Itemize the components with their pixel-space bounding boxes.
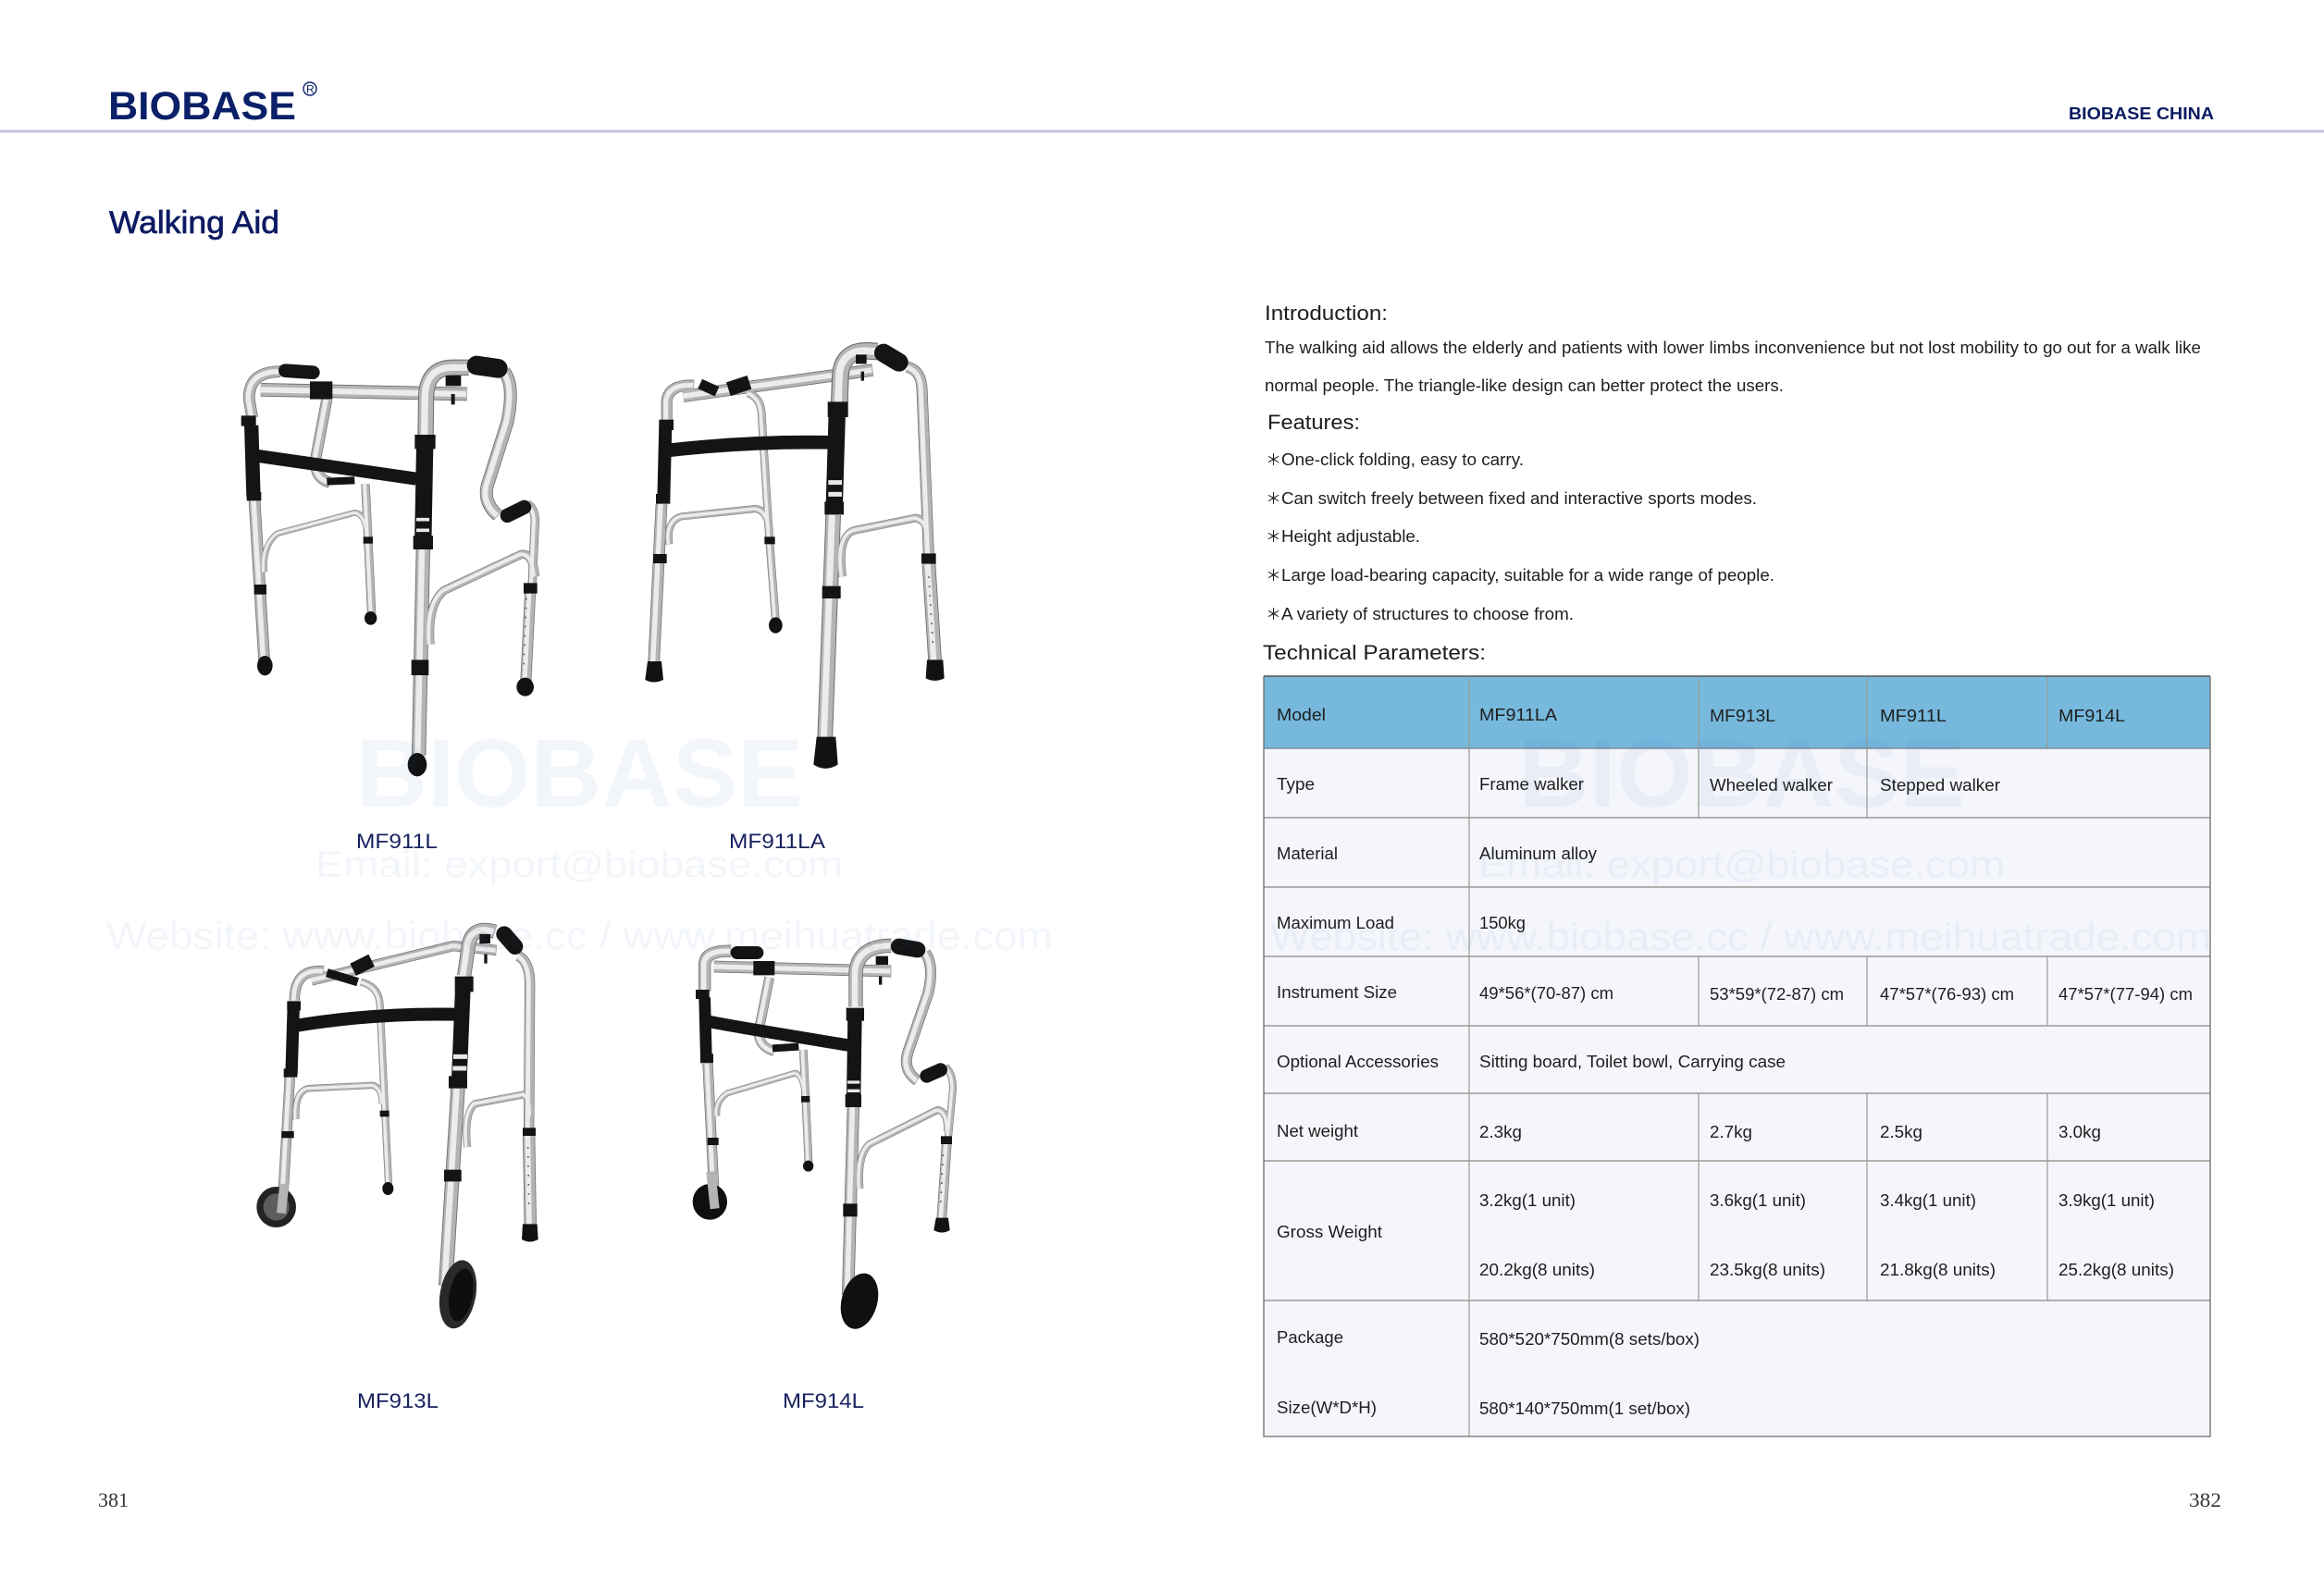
model label: MF914L: MF914L	[783, 1389, 864, 1412]
row: Instrument Size: 47*57*(76-93) cm	[1880, 984, 2014, 1004]
walker photo: MF911L	[241, 365, 538, 776]
row: Gross Weight: 3.9kg(1 unit)	[2058, 1190, 2155, 1210]
row: Type	[1277, 774, 2000, 795]
features list: ＊	[1266, 490, 1281, 508]
watermark over left page: Website: www.biobase.cc / www.meihuatrade.com	[106, 914, 1053, 957]
row: Maximum Load	[1277, 913, 1526, 932]
watermark over right page: Website: www.biobase.cc / www.meihuatrade.com	[1270, 915, 2211, 958]
row: Gross Weight	[1277, 1190, 2174, 1279]
row: Gross Weight: 23.5kg(8 units)	[1710, 1260, 1825, 1279]
row: Instrument Size: 47*57*(77-94) cm	[2058, 984, 2193, 1004]
row: Optional Accessories	[1277, 1052, 1786, 1071]
watermark over left page	[106, 720, 1053, 957]
introduction text: normal people. The triangle-like design can better protect the users.	[1265, 376, 1784, 395]
row: Type: Stepped walker	[1880, 775, 2000, 795]
page number 382: 382	[2189, 1488, 2221, 1511]
model label: MF911LA: MF911LA	[729, 830, 825, 853]
row: Gross Weight: 21.8kg(8 units)	[1880, 1260, 1996, 1279]
row: Gross Weight: 25.2kg(8 units)	[2058, 1260, 2174, 1279]
features list: One-click folding, easy to carry.	[1281, 450, 1524, 469]
row: Type: Wheeled walker	[1710, 775, 1833, 795]
features list: Height adjustable.	[1281, 526, 1420, 546]
page number 381: 381	[98, 1488, 129, 1511]
features list	[1266, 450, 1774, 623]
watermark over left page: Email: export@biobase.com	[315, 844, 843, 885]
row: Package Size: Package	[1277, 1327, 1343, 1347]
row: Net weight: Net weight	[1277, 1121, 1358, 1140]
features list: ＊	[1266, 606, 1281, 623]
row: Gross Weight: 20.2kg(8 units)	[1479, 1260, 1595, 1279]
walker photo: MF913L	[256, 930, 538, 1331]
row: Net weight: 3.0kg	[2058, 1122, 2101, 1141]
row: Gross Weight: 3.2kg(1 unit)	[1479, 1190, 1576, 1210]
row: Package Size: Size(W*D*H)	[1277, 1398, 1377, 1417]
row: Optional Accessories: Optional Accessories	[1277, 1052, 1439, 1071]
features list: Can switch freely between fixed and interactive sports modes.	[1281, 488, 1757, 508]
features list: ＊	[1266, 567, 1281, 585]
row: Net weight: 2.3kg	[1479, 1122, 1522, 1141]
row: Instrument Size	[1277, 982, 2193, 1004]
row: Optional Accessories: Sitting board, Toilet bowl, Carrying case	[1479, 1052, 1786, 1071]
features list: ＊	[1266, 451, 1281, 469]
walker photo: MF914L	[693, 945, 953, 1333]
section heading: Features: Features:	[1267, 411, 1360, 434]
row: Type: Type	[1277, 774, 1315, 794]
model label: MF913L: MF913L	[357, 1389, 439, 1412]
table: technical parameters	[1264, 676, 2211, 1436]
row: Gross Weight: Gross Weight	[1277, 1222, 1382, 1241]
walker photo: MF911LA	[645, 351, 945, 769]
features list: Large load-bearing capacity, suitable for a wide range of people.	[1281, 565, 1774, 585]
model label: MF911L: MF911L	[356, 830, 438, 853]
row: Instrument Size: Instrument Size	[1277, 982, 1397, 1002]
table header row: MF914L	[2058, 706, 2125, 725]
table header row: Model	[1277, 705, 1326, 724]
header logo: BIOBASE: BIOBASE	[108, 84, 296, 129]
introduction text: The walking aid allows the elderly and patients with lower limbs inconvenience but not lost mobility to go out for a walk like	[1265, 338, 2201, 357]
table header row: MF913L	[1710, 706, 1775, 725]
watermark over left page: BIOBASE	[356, 720, 803, 828]
row: Maximum Load: Maximum Load	[1277, 913, 1394, 932]
row: Instrument Size: 49*56*(70-87) cm	[1479, 983, 1613, 1003]
watermark over right page: BIOBASE	[1518, 720, 1965, 828]
features list: A variety of structures to choose from.	[1281, 604, 1574, 623]
table header row: MF911L	[1880, 706, 1947, 725]
section heading: Introduction: Introduction:	[1265, 302, 1388, 325]
row: Gross Weight: 3.6kg(1 unit)	[1710, 1190, 1806, 1210]
row: Material: Material	[1277, 844, 1338, 863]
row: Package Size: 580*140*750mm(1 set/box)	[1479, 1399, 1690, 1418]
row: Net weight: 2.7kg	[1710, 1122, 1752, 1141]
row: Gross Weight: 3.4kg(1 unit)	[1880, 1190, 1976, 1210]
row: Material: Aluminum alloy	[1479, 844, 1598, 863]
introduction text	[1265, 338, 2201, 395]
watermark over right page	[1270, 720, 2211, 958]
row: Package Size	[1277, 1327, 1700, 1418]
features list: ＊	[1266, 528, 1281, 546]
row: Maximum Load: 150kg	[1479, 913, 1526, 932]
section heading: Technical Parameters: Technical Parameters:	[1263, 641, 1486, 664]
row: Net weight: 2.5kg	[1880, 1122, 1922, 1141]
table header row: MF911LA	[1479, 705, 1558, 724]
watermark over right page: Email: export@biobase.com	[1478, 844, 2005, 885]
table header row	[1277, 705, 2125, 725]
row: Net weight	[1277, 1121, 2101, 1141]
row: Package Size: 580*520*750mm(8 sets/box)	[1479, 1329, 1700, 1349]
row: Instrument Size: 53*59*(72-87) cm	[1710, 984, 1844, 1004]
row: Material	[1277, 844, 1598, 863]
header logo: BIOBASE: R	[306, 83, 315, 96]
row: Type: Frame walker	[1479, 774, 1584, 794]
title: Walking Aid	[109, 205, 279, 240]
header label: BIOBASE CHINA: BIOBASE CHINA	[2069, 104, 2214, 123]
